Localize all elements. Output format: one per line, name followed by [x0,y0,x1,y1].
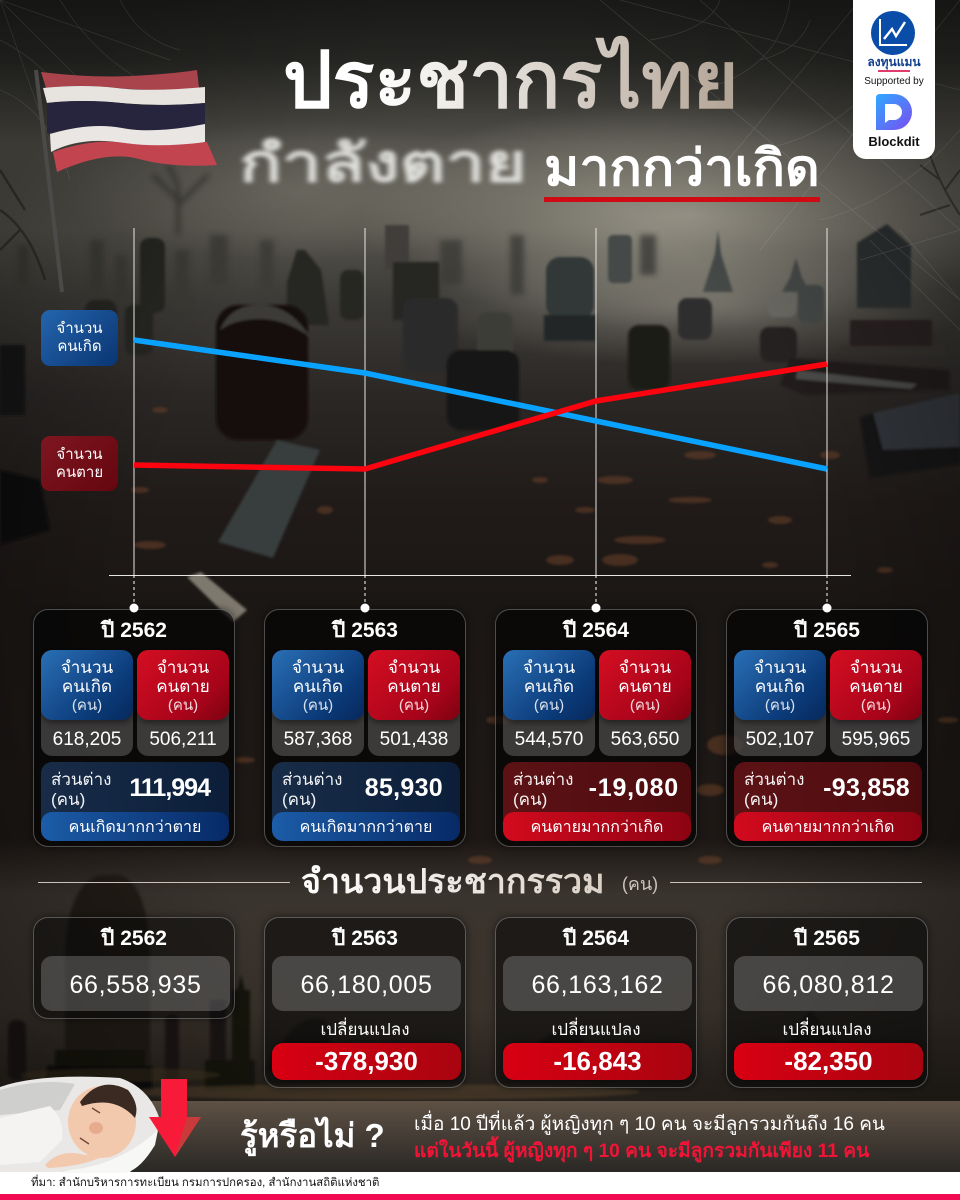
panel: 2565 births deaths: ส่วนต่าง [744,770,804,789]
panel: 2564 births deaths: จำนวน [619,658,671,677]
panel: 2563 births deaths: (คน) [282,790,316,809]
legend: deaths: คนตาย [56,464,103,481]
panel: total 2565: -82,350 [784,1046,873,1076]
legend: births: คนเกิด [57,338,102,355]
panel: 2562 births deaths: จำนวน [157,658,209,677]
panel: 2565 births deaths: 502,107 [746,729,814,750]
panel: 2563 births deaths: คนเกิดมากกว่าตาย [300,819,432,836]
panel: 2565 births deaths: คนตาย [849,677,903,696]
panel: 2565 births deaths: ปี 2565 [794,619,860,642]
panel: total 2565: เปลี่ยนแปลง [782,1020,872,1039]
cobwebs [0,0,960,330]
panel: 2562 births deaths [33,609,235,847]
panel: 2563 births deaths: คนเกิด [293,677,343,696]
far stones [18,235,656,310]
panel: 2564 births deaths: 544,570 [515,729,583,750]
panel: 2564 births deaths: ปี 2564 [563,619,629,642]
lower graveyard [8,875,255,1095]
panel: 2563 births deaths: (คน) [399,697,429,714]
panel: 2562 births deaths: 618,205 [53,729,121,750]
panel: total 2564: 66,163,162 [531,971,664,999]
panel: total 2563: -378,930 [315,1046,418,1076]
divider [878,70,910,72]
panel: 2564 births deaths: ส่วนต่าง [513,770,573,789]
panel: 2564 births deaths: (คน) [534,697,564,714]
panel: 2563 births deaths: 587,368 [284,729,352,750]
panel: 2563 births deaths: คนตาย [387,677,441,696]
heading: did you know: รู้หรือไม่ ? [240,1117,385,1154]
panel: did you know band [0,1101,960,1172]
panel: 2562 births deaths: 506,211 [149,729,217,750]
panel: 2562 births deaths: คนเกิดมากกว่าตาย [69,819,201,836]
panel: 2562 births deaths: (คน) [168,697,198,714]
panel: 2564 births deaths: คนตาย [618,677,672,696]
subtitle: blurred word: กำลังตาย [239,135,527,193]
panel: 2562 births deaths: จำนวน [61,658,113,677]
panel: 2563 births deaths: ส่วนต่าง [282,770,342,789]
panel: 2564 births deaths: (คน) [630,697,660,714]
panel: total 2562: ปี 2562 [101,927,167,950]
fact line 2: แต่ในวันนี้ ผู้หญิงทุก ๆ 10 คน จะมีลูกรวมกันเพียง 11 คน [414,1141,869,1162]
legend: deaths [41,436,118,491]
legend: deaths: จำนวน [56,446,103,463]
mid stones [85,225,458,373]
line: deaths [134,364,827,469]
panel: 2562 births deaths: คนเกิด [62,677,112,696]
section heading: total population: จำนวนประชากรรวม [301,863,604,901]
section heading: total population: (คน) [622,874,658,894]
panel: 2564 births deaths: (คน) [513,790,547,809]
Blockdit name: Blockdit [868,134,920,149]
source strip [0,1172,960,1194]
supported by: Supported by [864,76,924,87]
chart: births vs deaths lines [109,228,851,602]
bare trees [0,155,960,280]
line: births [134,340,827,469]
underline [544,197,820,202]
panel: 2565 births deaths: จำนวน [850,658,902,677]
panel: 2564 births deaths: คนตายมากกว่าเกิด [531,819,663,836]
panel: total 2564: -16,843 [553,1046,642,1076]
icon: red down arrow [149,1079,201,1157]
panel: total 2563: เปลี่ยนแปลง [320,1020,410,1039]
panel: 2565 births deaths: 595,965 [842,729,910,750]
panel: total 2564: ปี 2564 [563,927,629,950]
panel: total 2563: ปี 2563 [332,927,398,950]
fact line 1: เมื่อ 10 ปีที่แล้ว ผู้หญิงทุก ๆ 10 คน จะมีลูกรวมกันถึง 16 คน [414,1114,885,1135]
panel: 2563 births deaths: 501,438 [380,729,448,750]
panel: 2562 births deaths: 111,994 [129,774,210,802]
panel: 2565 births deaths: (คน) [861,697,891,714]
subtitle: more than births: มากกว่าเกิด [544,140,820,196]
panel: total 2564 [495,917,697,1088]
panel: 2562 births deaths: ปี 2562 [101,619,167,642]
panel: 2563 births deaths: 85,930 [365,774,443,802]
panel: 2562 births deaths: (คน) [72,697,102,714]
bottom pink bar [0,1194,960,1200]
panel: 2564 births deaths: 563,650 [611,729,679,750]
icon: Thai flag [34,70,217,292]
panel: 2562 births deaths: ส่วนต่าง [51,770,111,789]
timeline dots [130,604,832,612]
panel: 2565 births deaths: -93,858 [823,774,910,802]
panel: 2565 births deaths: จำนวน [754,658,806,677]
panel: total 2563: 66,180,005 [300,971,433,999]
legend: births: จำนวน [56,320,103,337]
panel: 2564 births deaths: จำนวน [523,658,575,677]
illustration: sleeping baby [0,1076,159,1173]
panel: 2562 births deaths: (คน) [51,790,85,809]
leaves [131,407,958,864]
logo panel [853,0,935,159]
panel: 2565 births deaths: คนตายมากกว่าเกิด [762,819,894,836]
panel: 2565 births deaths: (คน) [744,790,778,809]
panel: 2563 births deaths: (คน) [303,697,333,714]
source text: ที่มา: สำนักบริหารการทะเบียน กรมการปกครอง, สำนักงานสถิติแห่งชาติ [31,1177,379,1189]
panel: total 2565: ปี 2565 [794,927,860,950]
icon: Blockdit logo [876,94,912,130]
panel: 2564 births deaths: คนเกิด [524,677,574,696]
panel: 2563 births deaths: จำนวน [292,658,344,677]
panel: 2565 births deaths: คนเกิด [755,677,805,696]
panel: total 2565: 66,080,812 [762,971,895,999]
legend: births [41,310,118,366]
panel: total 2563 [264,917,466,1088]
panel: total 2562: 66,558,935 [69,971,202,999]
panel: 2565 births deaths: (คน) [765,697,795,714]
panel: total 2565 [726,917,928,1088]
panel: 2563 births deaths [264,609,466,847]
panel: 2562 births deaths: คนตาย [156,677,210,696]
brand name: ลงทุนแมน [867,55,921,69]
icon: ลงทุนแมน logo [871,11,915,55]
panel: total 2562 [33,917,235,1019]
title: ประชากรไทย [283,36,739,124]
panel: 2565 births deaths [726,609,928,847]
panel: total 2564: เปลี่ยนแปลง [551,1020,641,1039]
panel: 2564 births deaths: -19,080 [589,774,679,802]
section heading: total population [38,863,922,901]
panel: 2563 births deaths: ปี 2563 [332,619,398,642]
panel: 2564 births deaths [495,609,697,847]
panel: 2563 births deaths: จำนวน [388,658,440,677]
